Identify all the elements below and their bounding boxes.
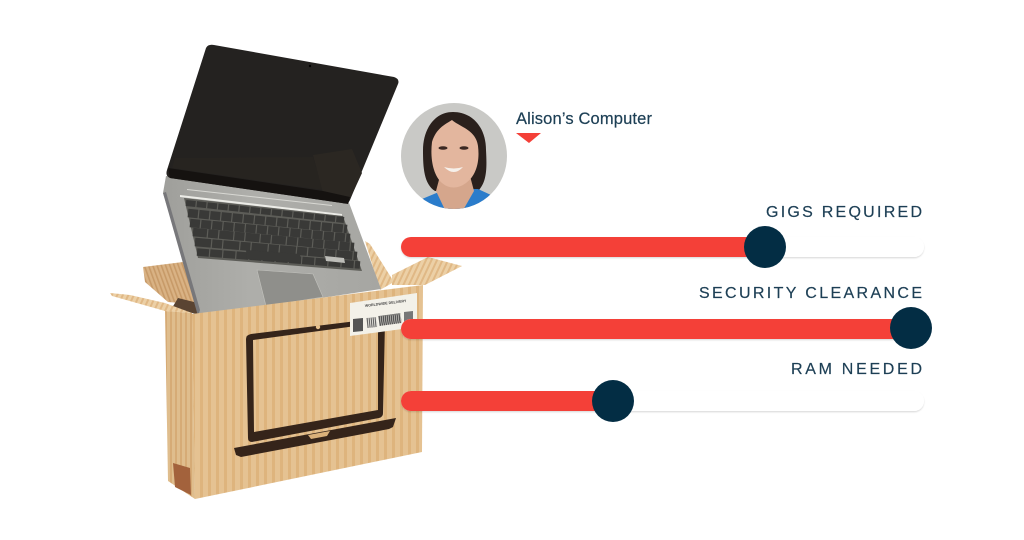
eyes	[438, 146, 448, 150]
cardboard box	[110, 257, 462, 499]
slider: gigs required	[401, 204, 924, 268]
label: RAM NEEDED	[791, 361, 922, 378]
box front panel	[192, 285, 423, 499]
infographic canvas	[110, 44, 932, 499]
laptop screen lid	[166, 45, 398, 204]
laptop hinge highlight	[180, 189, 342, 216]
box side panel	[165, 311, 195, 499]
right outer flap	[392, 257, 462, 285]
slider: ram needed	[401, 361, 924, 422]
laptop base	[163, 176, 381, 316]
shipping label: WORLDWIDE DELIVERY	[365, 299, 407, 308]
knob	[890, 307, 932, 349]
trackpad	[257, 270, 323, 306]
box corner patch	[173, 463, 191, 495]
heading: Alison's Computer: Alison’s Computer	[516, 110, 652, 128]
track	[401, 319, 924, 339]
left outer flap	[110, 293, 192, 313]
fill	[401, 319, 910, 339]
avatar	[400, 102, 508, 212]
face	[431, 120, 478, 188]
knob	[744, 226, 786, 268]
smile	[444, 167, 463, 172]
track	[401, 237, 924, 257]
knob	[592, 380, 634, 422]
laptop	[163, 45, 398, 316]
shipping label	[350, 293, 417, 336]
neck and chest	[436, 178, 474, 209]
hair	[423, 112, 486, 191]
cardboard box back flaps	[143, 241, 394, 316]
laptop icon on box	[234, 318, 396, 457]
keyboard	[184, 198, 362, 271]
red pointer triangle	[516, 133, 541, 143]
shirt	[422, 189, 490, 209]
laptop left edge	[163, 192, 200, 316]
label: SECURITY CLEARANCE	[699, 285, 922, 302]
track	[401, 391, 924, 411]
fill	[401, 391, 613, 411]
fill	[401, 237, 765, 257]
label: GIGS REQUIRED	[766, 204, 922, 221]
slider: security clearance	[401, 285, 932, 349]
